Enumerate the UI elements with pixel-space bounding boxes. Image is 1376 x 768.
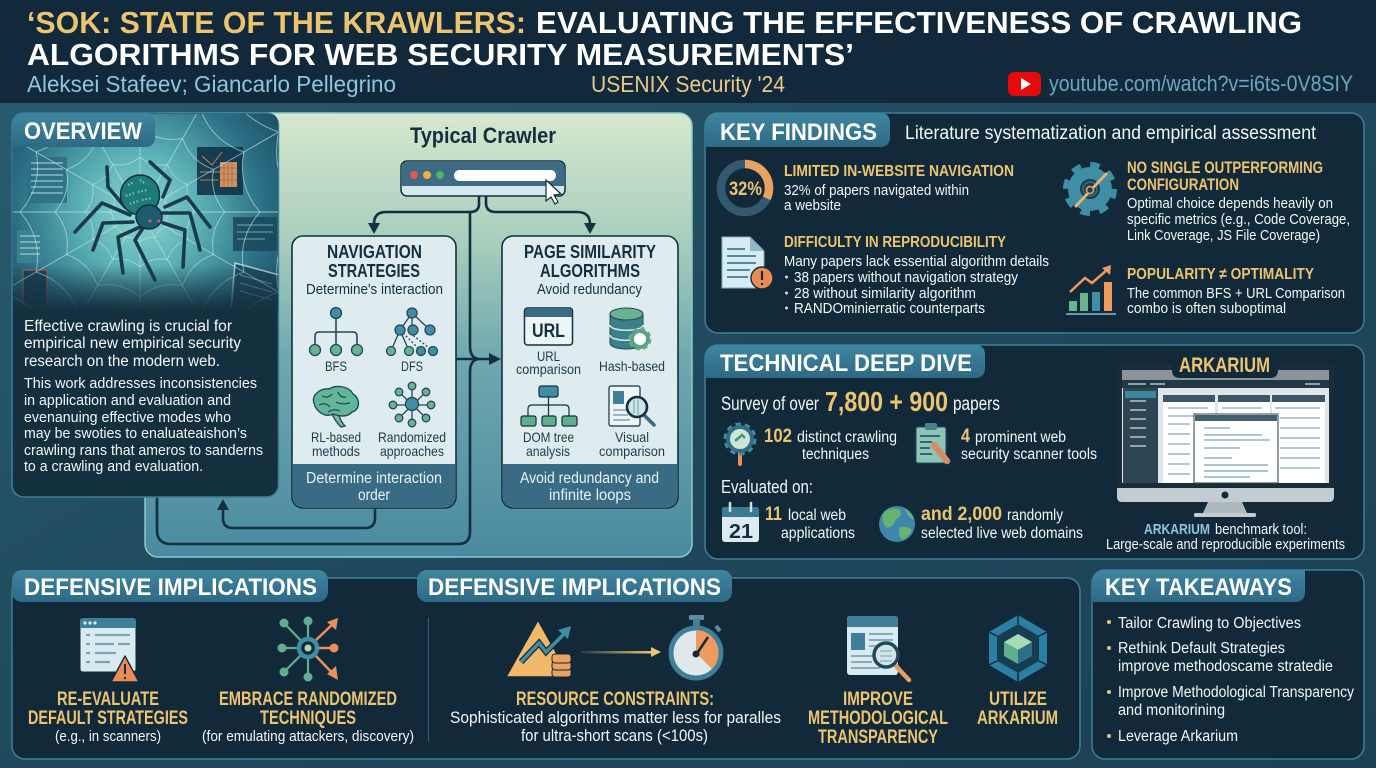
icon: randomized network bbox=[389, 382, 435, 427]
action: utilize arkarium: UTILIZE bbox=[989, 689, 1047, 710]
title: ALGORITHMS FOR WEB SECURITY MEASUREMENTS’ bbox=[27, 37, 854, 72]
stat: scanner tools: 4 bbox=[961, 426, 970, 447]
stat: local web applications: 11 bbox=[765, 504, 782, 525]
stat: local web applications: applications bbox=[781, 525, 855, 542]
action: re-evaluate defaults: DEFAULT STRATEGIES bbox=[28, 708, 188, 729]
action: resource constraints: for ultra-short scans (<100s) bbox=[521, 727, 708, 745]
action: embrace randomized: TECHNIQUES bbox=[260, 708, 356, 729]
icon: youtube bbox=[1008, 72, 1041, 96]
panel: technical deep dive bbox=[705, 345, 1364, 559]
finding: no single configuration bbox=[1127, 159, 1350, 244]
deep dive tab: TECHNICAL DEEP DIVE bbox=[720, 350, 972, 377]
finding: reproducibility: 38 papers without navigation strategy bbox=[794, 270, 1019, 286]
finding: popularity bbox=[1127, 266, 1345, 317]
similarity footer: Avoid redundancy and bbox=[520, 470, 659, 487]
ARKARIUM caption: benchmark tool: bbox=[1215, 521, 1307, 538]
action: resource constraints: RESOURCE CONSTRAINTS: bbox=[516, 689, 714, 710]
action: improve transparency: IMPROVE bbox=[843, 689, 913, 710]
finding: no single configuration: Link Coverage, JS File Coverage) bbox=[1127, 228, 1320, 244]
illustration: spider on web bbox=[13, 114, 278, 310]
similarity heading: PAGE SIMILARITY bbox=[524, 242, 656, 262]
evaluated on label: Evaluated on: bbox=[721, 477, 813, 497]
icon: clipboard bbox=[916, 423, 947, 463]
similarity heading bbox=[524, 242, 656, 281]
randomized label bbox=[378, 429, 446, 459]
action: re-evaluate defaults: (e.g., in scanners) bbox=[55, 728, 161, 745]
URL label: URL bbox=[537, 348, 560, 364]
ARKARIUM caption: ARKARIUM bbox=[1144, 521, 1210, 538]
icon: visual comparison bbox=[609, 386, 654, 426]
icon: URL window bbox=[524, 308, 572, 345]
icon: URL window: URL bbox=[532, 321, 565, 342]
action: embrace randomized bbox=[202, 689, 414, 745]
URL label bbox=[516, 348, 581, 377]
overview body text: to a crawling and evaluation. bbox=[24, 458, 203, 475]
finding: reproducibility: DIFFICULTY IN REPRODUCIBILITY bbox=[784, 234, 1006, 251]
action: improve transparency: METHODOLOGICAL bbox=[808, 708, 948, 729]
icon: warning with trend and coins bbox=[506, 620, 571, 677]
overview intro text: empirical new empirical security bbox=[24, 335, 241, 352]
randomized label: approaches bbox=[380, 443, 444, 459]
ARKARIUM heading: ARKARIUM bbox=[1179, 354, 1270, 377]
action: resource constraints: Sophisticated algorithms matter less for paralles bbox=[450, 709, 781, 727]
takeaway bullets bbox=[1107, 615, 1354, 745]
takeaways tab: KEY TAKEAWAYS bbox=[1105, 574, 1292, 601]
icon: arkarium hexagon bbox=[989, 615, 1047, 682]
icon: stopwatch bbox=[671, 615, 721, 678]
finding: reproducibility bbox=[784, 234, 1049, 317]
icon: document alert bbox=[722, 237, 773, 289]
icon: brain bbox=[313, 387, 359, 427]
overview body text: evenanuing effective modes who bbox=[24, 409, 231, 426]
subtitle: Literature systematization and empirical assessment bbox=[905, 123, 1317, 144]
icon: DOM tree bbox=[521, 386, 577, 426]
takeaway bullets: Improve Methodological Transparency bbox=[1118, 684, 1354, 701]
overview body text: crawling rans that ameros to sanderns bbox=[24, 442, 263, 459]
action: re-evaluate defaults bbox=[28, 689, 188, 745]
overview tab: OVERVIEW bbox=[24, 118, 142, 145]
crawler heading: Typical Crawler bbox=[410, 123, 556, 148]
panel: key takeaways bbox=[1092, 570, 1364, 759]
icon: DFS tree bbox=[386, 308, 438, 356]
stat: scanner tools: security scanner tools bbox=[961, 446, 1097, 463]
RL label: RL-based bbox=[311, 429, 361, 445]
overview body text: This work addresses inconsistencies bbox=[24, 375, 257, 392]
icon: browser window bbox=[401, 161, 565, 204]
defensive tab one: DEFENSIVE IMPLICATIONS bbox=[24, 574, 317, 601]
finding: popularity: POPULARITY ≠ OPTIMALITY bbox=[1127, 266, 1314, 283]
action: improve transparency: TRANSPARENCY bbox=[818, 727, 938, 748]
finding: popularity: The common BFS + URL Comparison bbox=[1127, 286, 1345, 302]
title bbox=[27, 5, 1302, 72]
finding: reproducibility: Many papers lack essential algorithm details bbox=[784, 254, 1049, 270]
stat: crawling techniques: techniques bbox=[802, 446, 869, 463]
randomized label: Randomized bbox=[378, 429, 446, 445]
similarity footer bbox=[520, 470, 659, 504]
action: resource constraints bbox=[450, 689, 781, 745]
URL label: comparison bbox=[516, 361, 581, 377]
finding: limited navigation: a website bbox=[784, 198, 841, 214]
panel: page similarity bbox=[502, 236, 678, 508]
nav heading: NAVIGATION bbox=[327, 242, 422, 262]
stat: crawling techniques: distinct crawling bbox=[797, 429, 897, 446]
finding: no single configuration: NO SINGLE OUTPERFORMING bbox=[1127, 159, 1323, 177]
finding: reproducibility: 28 without similarity algorithm bbox=[794, 286, 976, 302]
stat: crawling techniques: 102 bbox=[764, 426, 792, 447]
icon: globe bbox=[879, 506, 915, 542]
survey stat: 7,800 + 900 bbox=[825, 386, 948, 417]
stat: live web domains bbox=[921, 504, 1083, 542]
venue: USENIX Security '24 bbox=[591, 71, 785, 97]
survey stat bbox=[721, 386, 1000, 417]
takeaway bullets: improve methodoscame stratedie bbox=[1118, 658, 1333, 675]
donut chart: 32 percent bbox=[721, 164, 769, 212]
finding: limited navigation: 32% of papers navigated within bbox=[784, 183, 969, 199]
finding: no single configuration: Optimal choice depends heavily on bbox=[1127, 196, 1333, 212]
survey stat: Survey of over bbox=[721, 394, 820, 415]
arrow: constraints to stopwatch bbox=[581, 647, 661, 657]
action: embrace randomized: (for emulating attackers, discovery) bbox=[202, 728, 414, 745]
finding: popularity: combo is often suboptimal bbox=[1127, 301, 1286, 317]
RL label: methods bbox=[312, 443, 360, 459]
finding: no single configuration: CONFIGURATION bbox=[1127, 176, 1239, 194]
DOM label bbox=[523, 429, 574, 459]
nav subheading: Determine's interaction bbox=[306, 282, 443, 298]
visual label: Visual bbox=[615, 429, 649, 445]
visual label bbox=[599, 429, 665, 459]
panel: defensive implications bbox=[12, 570, 1080, 759]
stat: local web applications bbox=[765, 504, 855, 542]
title: EVALUATING THE EFFECTIVENESS OF CRAWLING bbox=[536, 5, 1302, 40]
takeaway bullets: Rethink Default Strategies bbox=[1118, 640, 1285, 657]
finding: reproducibility: RANDOminierratic counterparts bbox=[794, 301, 985, 317]
overview intro text: research on the modern web. bbox=[24, 353, 220, 370]
nav heading bbox=[327, 242, 422, 281]
nav footer: order bbox=[358, 487, 390, 504]
stat: local web applications: local web bbox=[788, 507, 846, 524]
DOM label: DOM tree bbox=[523, 429, 574, 445]
stat: live web domains: and 2,000 bbox=[921, 504, 1002, 525]
icon: calendar bbox=[722, 503, 759, 543]
overview intro text bbox=[24, 318, 241, 370]
DFS label: DFS bbox=[401, 358, 423, 374]
action: improve transparency bbox=[808, 689, 948, 748]
finding: limited navigation bbox=[784, 163, 1014, 214]
overview body text bbox=[24, 375, 263, 475]
icon: gear compass bbox=[1067, 166, 1113, 212]
stat: live web domains: selected live web domains bbox=[921, 525, 1083, 542]
overview body text: may be swoties to enaluateaishon’s bbox=[24, 425, 247, 442]
donut chart: 32 percent: 32% bbox=[729, 179, 762, 200]
icon: randomized network bbox=[278, 616, 338, 682]
nav footer: Determine interaction bbox=[306, 470, 442, 487]
icon: calendar: 21 bbox=[729, 521, 753, 543]
similarity heading: ALGORITHMS bbox=[540, 261, 640, 281]
similarity footer: infinite loops bbox=[549, 487, 631, 504]
RL label bbox=[311, 429, 361, 459]
nav footer bbox=[306, 470, 442, 504]
title: ‘SOK: STATE OF THE KRAWLERS: bbox=[27, 5, 526, 40]
stat: scanner tools: prominent web bbox=[975, 429, 1066, 446]
survey stat: papers bbox=[953, 394, 1000, 415]
DOM label: analysis bbox=[526, 443, 570, 459]
stat: scanner tools bbox=[961, 426, 1097, 463]
hash label: Hash-based bbox=[599, 358, 665, 374]
icon: database gear bbox=[610, 308, 649, 349]
panel: overview bbox=[11, 112, 280, 498]
icon: BFS tree bbox=[310, 308, 362, 356]
panel: typical crawler bbox=[145, 113, 692, 557]
action: utilize arkarium: ARKARIUM bbox=[977, 708, 1058, 729]
header band bbox=[0, 0, 1376, 103]
overview body text: in application and evaluation and bbox=[24, 392, 231, 409]
finding: limited navigation: LIMITED IN-WEBSITE NAVIGATION bbox=[784, 163, 1014, 180]
stat: crawling techniques bbox=[764, 426, 897, 463]
stat: live web domains: randomly bbox=[1007, 507, 1063, 524]
panel: key findings bbox=[705, 113, 1364, 333]
icon: rising bar chart bbox=[1066, 265, 1116, 314]
nav heading: STRATEGIES bbox=[328, 261, 420, 281]
action: utilize arkarium bbox=[977, 689, 1058, 729]
defensive tab two: DEFENSIVE IMPLICATIONS bbox=[428, 574, 721, 601]
overview intro text: Effective crawling is crucial for bbox=[24, 318, 232, 335]
illustration: ARKARIUM monitor bbox=[1117, 364, 1334, 517]
icon: gear magnifier bbox=[726, 425, 754, 464]
similarity subheading: Avoid redundancy bbox=[537, 282, 643, 298]
takeaway bullets: Leverage Arkarium bbox=[1118, 728, 1238, 745]
visual label: comparison bbox=[599, 443, 665, 459]
authors: Aleksei Stafeev; Giancarlo Pellegrino bbox=[27, 71, 396, 97]
action: re-evaluate defaults: RE-EVALUATE bbox=[57, 689, 159, 710]
ARKARIUM caption bbox=[1106, 521, 1345, 553]
icon: document magnifier bbox=[847, 616, 909, 680]
panel: navigation strategies bbox=[292, 236, 456, 508]
finding: no single configuration: specific metrics (e.g., Code Coverage, bbox=[1127, 212, 1350, 228]
icon: window warning bbox=[80, 618, 139, 682]
BFS label: BFS bbox=[325, 358, 347, 374]
takeaway bullets: Tailor Crawling to Objectives bbox=[1118, 615, 1301, 632]
connector arrows bbox=[157, 196, 596, 544]
takeaway bullets: and monitorining bbox=[1118, 702, 1225, 719]
action: embrace randomized: EMBRACE RANDOMIZED bbox=[219, 689, 397, 710]
key findings tab: KEY FINDINGS bbox=[720, 119, 877, 146]
